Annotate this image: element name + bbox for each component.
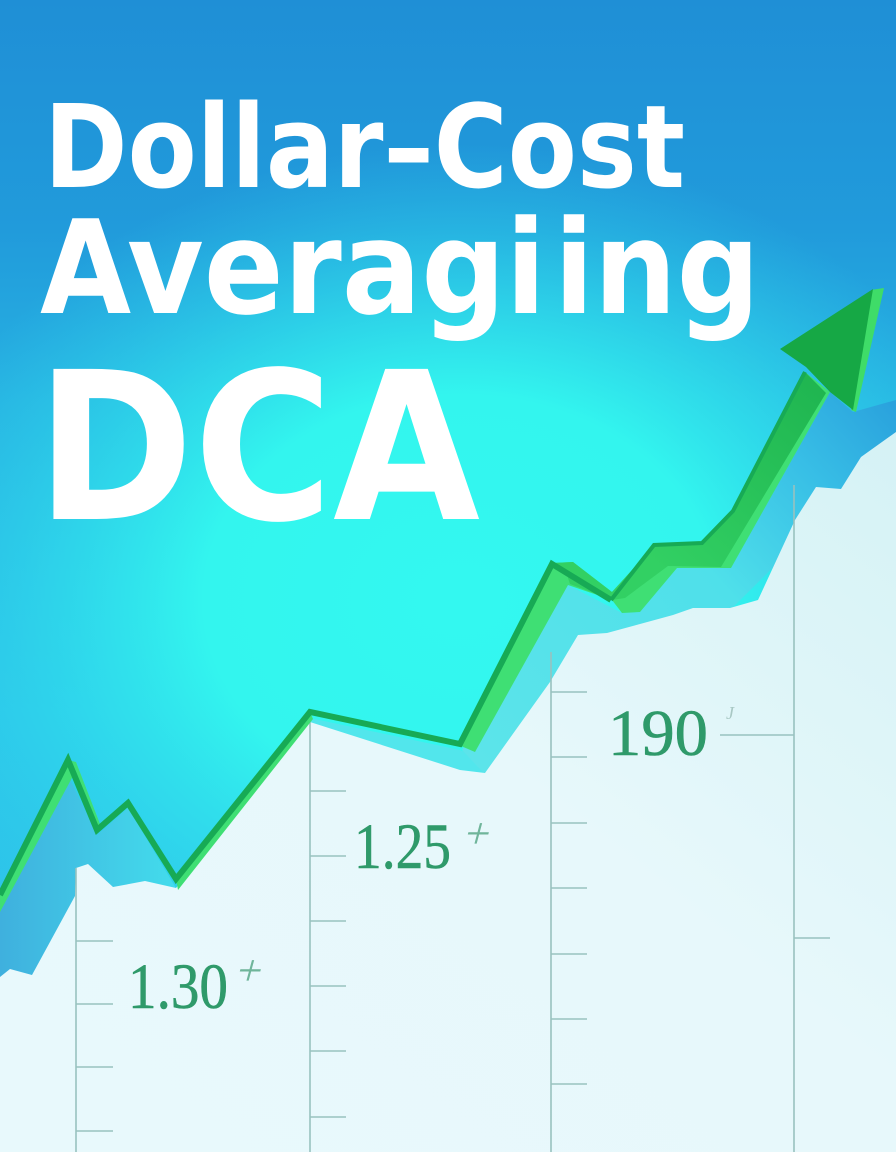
label 1.30+: 1.30 <box>128 951 228 1023</box>
label 190: J <box>726 703 735 723</box>
axis 3 <box>551 652 587 1152</box>
axis 4 <box>720 485 830 1152</box>
axis 2 <box>310 722 346 1152</box>
growth line with arrow <box>0 288 884 912</box>
value labels <box>128 697 735 1023</box>
dark green line <box>0 372 805 895</box>
title line: Dollar-Cost: Dollar–Cost <box>44 81 685 215</box>
mid green ribbon <box>552 372 826 600</box>
title line: DCA: DCA <box>36 328 480 568</box>
label 1.25+: + <box>459 809 497 858</box>
title line: Averagi ing: ing <box>554 192 760 344</box>
title <box>36 81 760 568</box>
label 190: 190 <box>608 697 708 770</box>
axis lines and tick marks <box>76 485 830 1152</box>
axis 1 <box>76 868 113 1152</box>
light green ribbon <box>0 372 830 912</box>
label 1.30+: + <box>231 946 269 995</box>
title line: Averagi ing: Averagi <box>40 192 546 344</box>
arrow head <box>780 288 884 412</box>
shadow band under the growth line <box>0 392 896 990</box>
pale area chart <box>0 432 896 1152</box>
label 1.25+: 1.25 <box>354 811 451 883</box>
